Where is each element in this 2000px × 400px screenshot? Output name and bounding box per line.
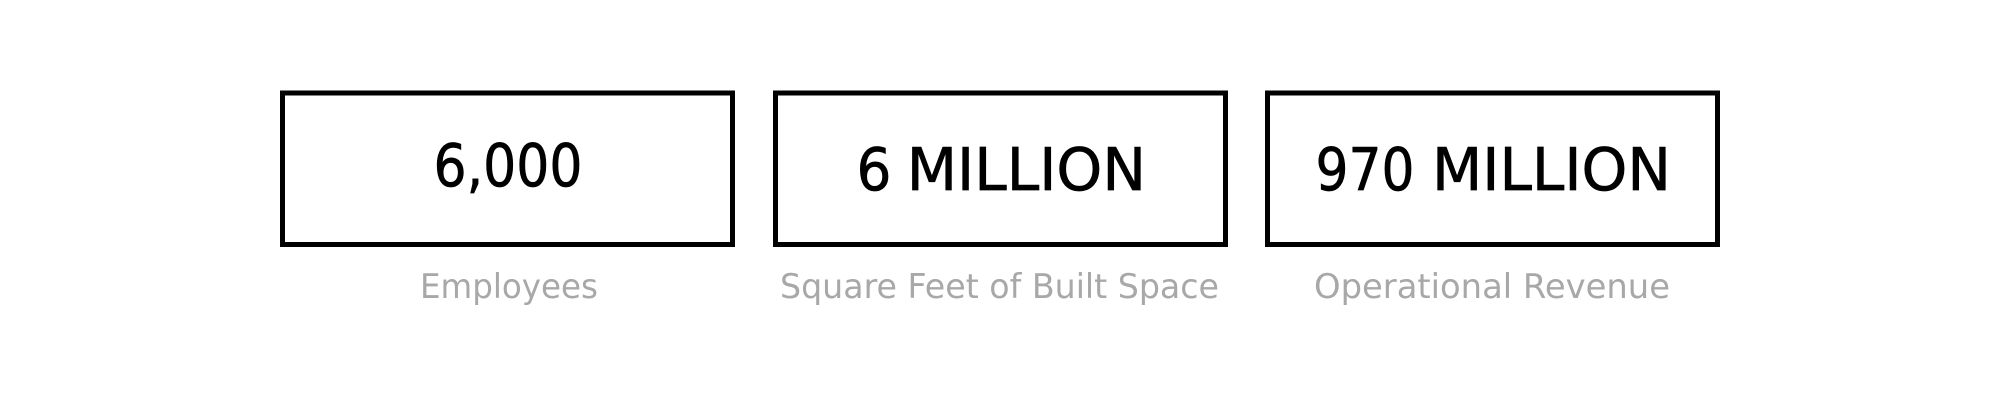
box: employees — [282, 93, 732, 244]
value: 6,000: 6,000 — [434, 131, 582, 200]
value: 6 million: 6 — [856, 135, 892, 204]
value: 970 million: 970 — [1316, 135, 1414, 204]
value: 970 million — [1316, 135, 1671, 204]
label: employees: Employees — [420, 267, 598, 307]
label: operational revenue: Operational Revenue — [1314, 267, 1670, 307]
panel: built space — [776, 93, 1226, 307]
box: built space — [776, 93, 1226, 244]
label: square feet of built space: Square Feet of Built Space — [780, 267, 1219, 307]
box: operational revenue — [1268, 93, 1718, 244]
value: 970 million: MILLION — [1432, 135, 1671, 204]
panel: operational revenue — [1268, 93, 1718, 307]
value: 6 million: MILLION — [907, 135, 1146, 204]
panel: employees — [282, 93, 732, 307]
